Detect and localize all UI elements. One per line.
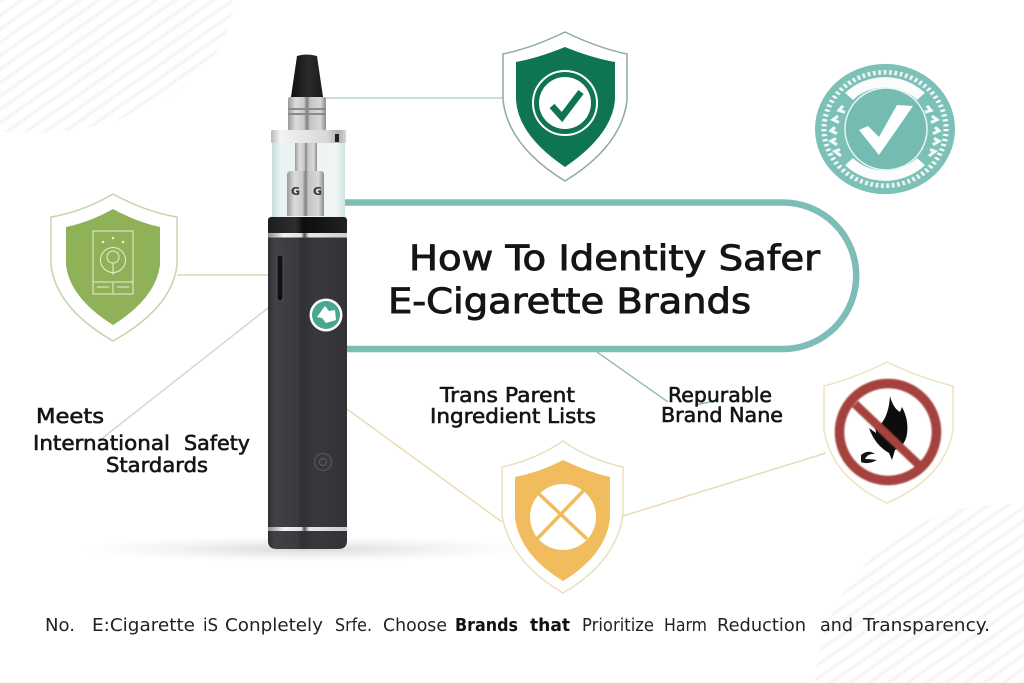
silver band bottom — [268, 527, 347, 531]
black cap — [268, 217, 347, 235]
footer statement: Reduction — [717, 615, 806, 636]
footer statement — [45, 615, 990, 636]
footer statement: iS — [203, 615, 218, 636]
glass tank: G — [313, 185, 322, 198]
icon: green check shield — [503, 32, 627, 181]
heading — [388, 239, 821, 322]
label: transparent ingredient lists — [430, 383, 596, 428]
label: meets international safety standards: Meets — [36, 404, 104, 428]
device shadow — [80, 536, 530, 562]
label: meets international safety standards: International — [33, 431, 170, 455]
background stripes: top left — [0, 0, 240, 140]
prohibition sign — [840, 384, 936, 480]
label: transparent ingredient lists: Ingredient Lists — [430, 404, 596, 428]
background stripes: bottom right — [810, 500, 1024, 683]
footer statement: E:Cigarette — [92, 615, 195, 636]
label: reputable brand name: Repurable — [668, 383, 772, 407]
footer statement: Brands — [455, 615, 518, 636]
icon: yellow cross shield — [502, 441, 623, 593]
heading: E-Cigarette Brands — [388, 282, 751, 322]
footer statement: Transparency. — [862, 615, 990, 636]
label: reputable brand name — [661, 383, 783, 427]
connector lines — [100, 98, 826, 522]
icon: olive certificate shield — [51, 194, 177, 341]
heading: How To Identity Safer — [409, 239, 821, 279]
power button — [314, 454, 332, 470]
footer statement: and — [820, 615, 853, 636]
smoke wisp — [861, 452, 877, 463]
glass tank: G — [291, 185, 300, 198]
footer statement: Srfe. — [335, 615, 372, 636]
silver tank ring — [271, 130, 346, 143]
title pill panel — [345, 202, 856, 349]
device body — [268, 234, 347, 549]
metal collar — [288, 97, 326, 131]
silver band top — [268, 233, 347, 238]
flame — [869, 396, 907, 460]
footer statement: Choose — [383, 615, 447, 636]
e-cigarette device — [268, 54, 347, 549]
drip tip — [291, 54, 323, 97]
footer statement: No. — [45, 615, 75, 636]
label: meets international safety standards: Stardards — [106, 453, 208, 477]
icon: teal certification badge — [815, 64, 955, 194]
label: meets international safety standards — [33, 404, 250, 477]
footer statement: that — [530, 615, 570, 636]
glass tank — [272, 141, 345, 219]
logo badge — [310, 298, 342, 332]
footer statement: Harm — [664, 615, 707, 636]
footer statement: Prioritize — [582, 615, 654, 636]
label: meets international safety standards: Safety — [184, 431, 250, 455]
label: transparent ingredient lists: Trans Parent — [439, 383, 575, 407]
side slot — [277, 255, 283, 301]
footer statement: Conpletely — [225, 615, 323, 636]
icon: no-flame shield — [824, 362, 953, 503]
label: reputable brand name: Brand Nane — [661, 403, 783, 427]
